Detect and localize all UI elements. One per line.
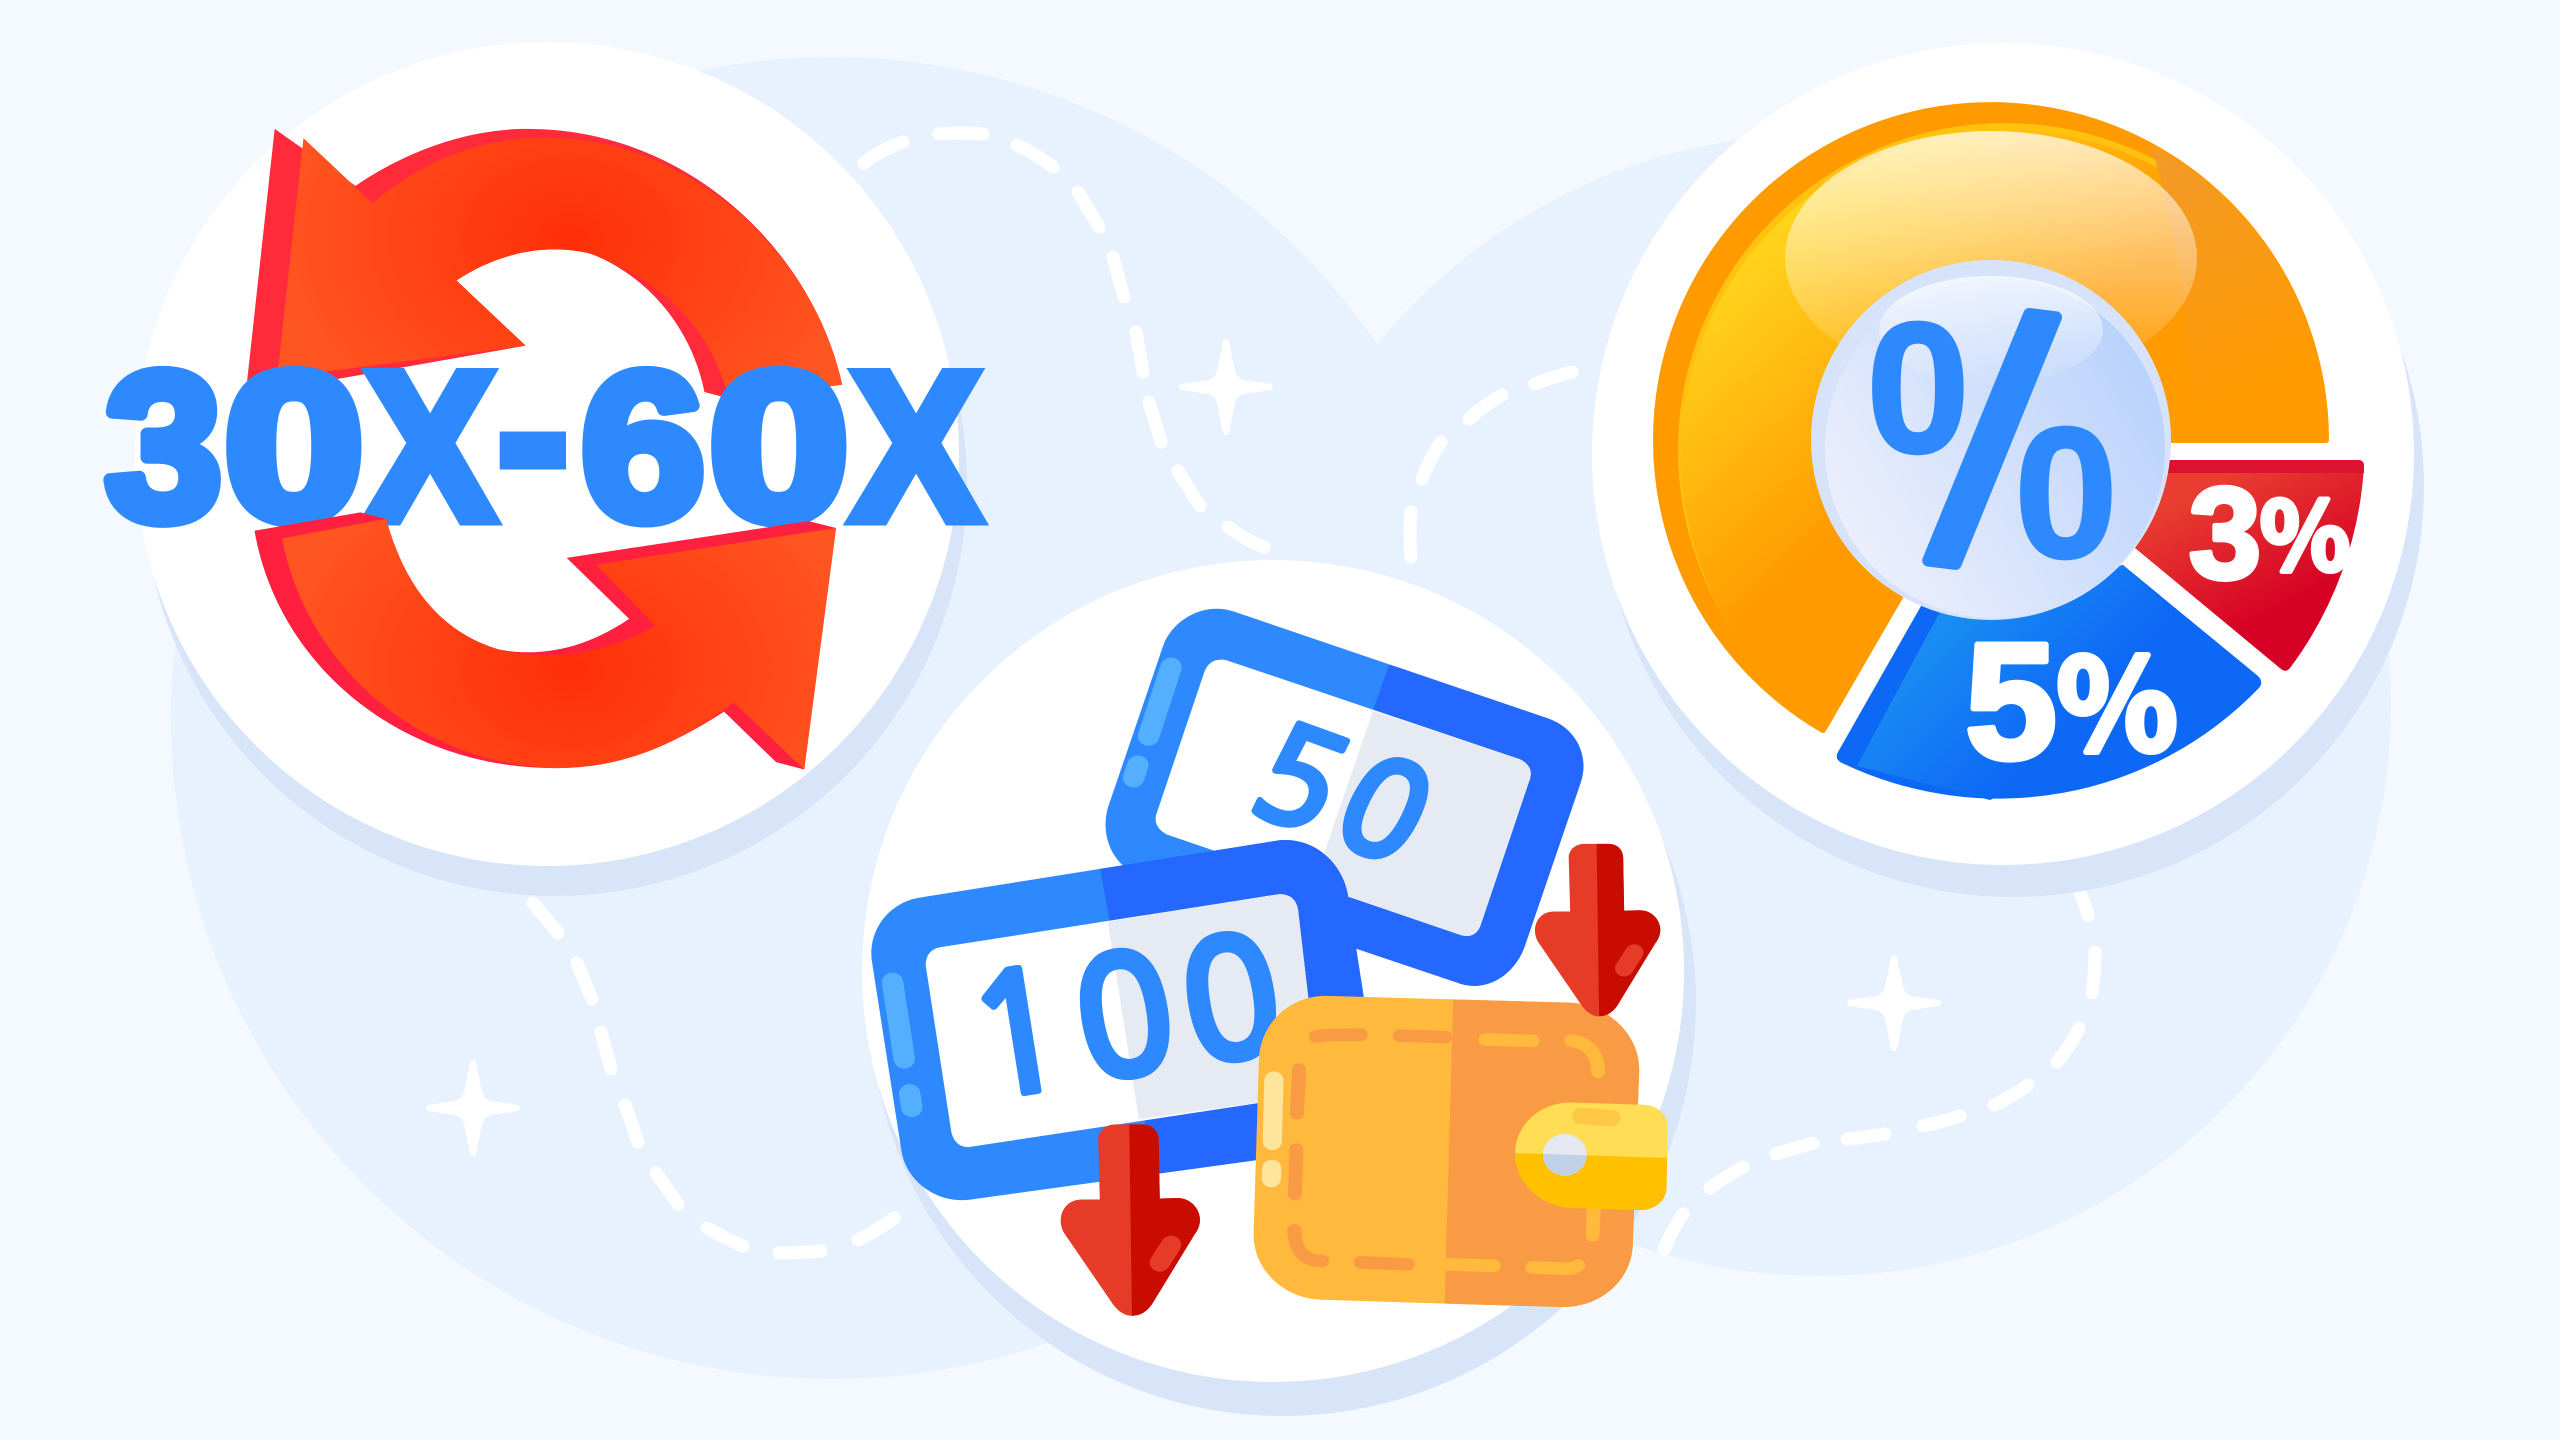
label: 5%: % <box>2056 605 2178 787</box>
percent symbol: / <box>1919 244 2065 644</box>
label: 50: 50 <box>1230 707 1459 890</box>
icon: 100 banknote <box>871 840 1364 1200</box>
heading: 30X-60X: - <box>498 315 568 550</box>
panel: percentage circle <box>1592 43 2424 897</box>
percent bubble <box>1811 244 2171 644</box>
icon: top circular arrow <box>247 129 842 398</box>
heading: 30X-60X: X <box>852 329 980 564</box>
wallet clasp <box>1515 1102 1668 1210</box>
background blob shape <box>171 57 2391 1379</box>
heading: 30X-60X: 0 <box>224 329 364 564</box>
percent symbol <box>1866 244 2118 644</box>
label: 3%: % <box>2260 462 2350 598</box>
pie slice: blue 5% <box>1837 565 2261 800</box>
label: 100: 100 <box>955 913 1301 1127</box>
label: 3%: 3 <box>2189 460 2261 606</box>
heading: 30X-60X: 6 <box>581 329 705 564</box>
pie slice: red 3% <box>2135 460 2364 671</box>
label: 3% <box>2189 460 2350 606</box>
panel: wagering circle <box>105 42 980 896</box>
heading: 30X-60X: X <box>366 329 494 564</box>
pie slice: large orange <box>1656 105 2340 780</box>
heading: 30X-60X: 0 <box>709 329 849 564</box>
sparkle stars <box>426 339 1941 1156</box>
percent symbol: 0 <box>2014 390 2118 597</box>
icon: bottom circular arrow <box>254 512 836 770</box>
label: 5%: 5 <box>1965 609 2057 793</box>
icon: wallet <box>1254 992 1676 1317</box>
panel: bills and wallet circle <box>862 560 1696 1416</box>
heading: 30X-60X: 3 <box>105 329 222 564</box>
percent symbol: 0 <box>1866 285 1970 492</box>
icon: 50 banknote <box>1106 608 1584 986</box>
label: 5% <box>1965 605 2178 793</box>
icon: down arrow on wallet <box>1535 844 1660 1016</box>
icon: down arrow on 100 bill <box>1061 1124 1200 1316</box>
dashed connector paths <box>533 133 2095 1253</box>
